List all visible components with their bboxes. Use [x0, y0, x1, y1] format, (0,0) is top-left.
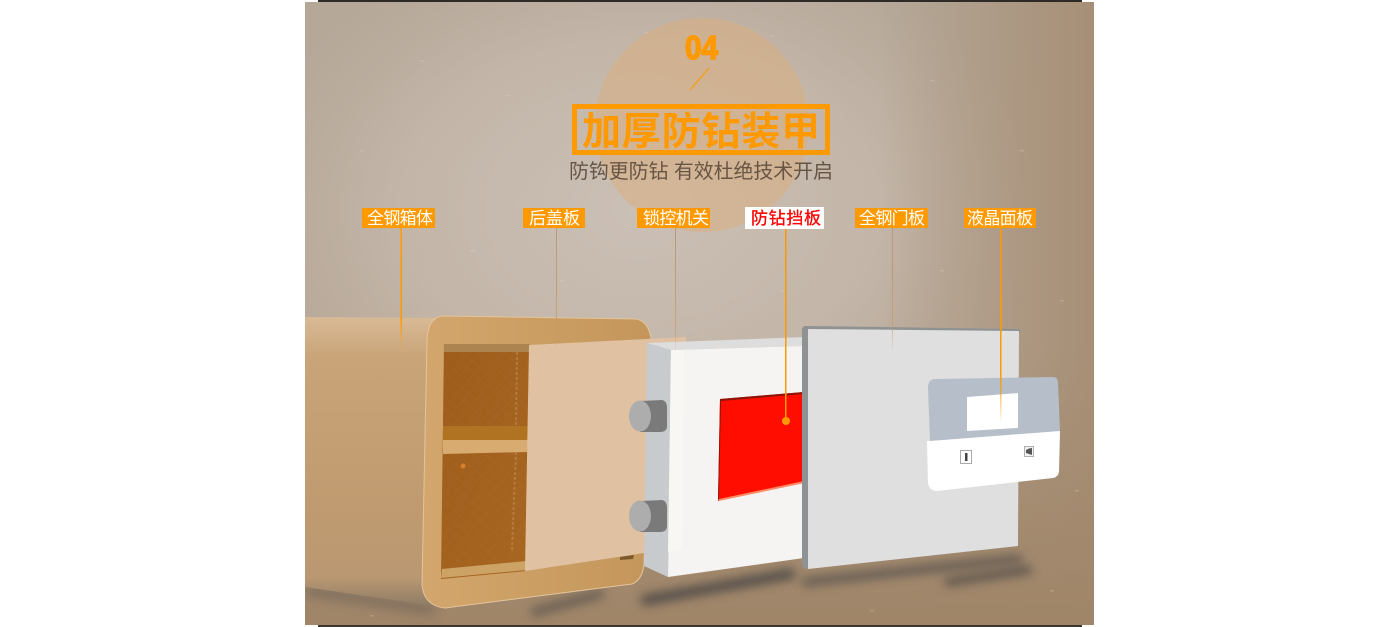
side wall: [305, 317, 445, 606]
label: 液晶面板: 液晶面板: [967, 209, 1033, 228]
title: 加厚防钻装甲: [582, 111, 820, 154]
LCD screen: [967, 393, 1018, 431]
lock bolt: upper: [629, 400, 667, 432]
red anti-drill plate: [718, 392, 804, 501]
slash accent: [690, 68, 709, 90]
label: 全钢箱体: 全钢箱体: [367, 209, 433, 228]
steel door plate: [802, 326, 1020, 569]
shelf: [443, 426, 528, 440]
rib: [512, 352, 517, 550]
front face highlight: [668, 350, 684, 552]
LCD panel: [927, 377, 1060, 491]
infographic canvas: [305, 0, 1094, 627]
lock bolt: lower: [629, 500, 667, 532]
safe body: steel box: [305, 316, 651, 608]
background panel: [305, 2, 1094, 625]
side face: [644, 343, 671, 577]
leader lines: [400, 228, 1002, 425]
top face: [647, 337, 804, 350]
label: 后盖板: 后盖板: [529, 209, 580, 228]
bottom dark strip: [318, 625, 1082, 627]
key icon: speaker: [1024, 446, 1034, 456]
lock mechanism box: [644, 337, 804, 577]
section number: 04: [685, 29, 719, 66]
inner bottom lip: [441, 561, 526, 578]
bottom slot: [620, 555, 634, 560]
label: 全钢门板: 全钢门板: [859, 209, 925, 228]
panel blue-grey top: [928, 377, 1060, 441]
label: 锁控机关: 锁控机关: [643, 209, 709, 228]
decorative circle behind title: [595, 18, 809, 232]
key icon: power: [960, 450, 972, 464]
back cover plate: [525, 337, 686, 571]
subtitle: 防钩更防钻 有效杜绝技术开启: [569, 160, 833, 183]
panel white bottom: [927, 431, 1060, 491]
inner top band: [444, 344, 530, 352]
interior: [441, 344, 530, 579]
floor shadows: [305, 559, 1028, 612]
screw mark: [460, 464, 466, 468]
front frame: [422, 316, 651, 608]
front face: [668, 346, 804, 577]
label: 防钻挡板: 防钻挡板: [751, 209, 821, 228]
top dark strip: [318, 0, 1082, 2]
